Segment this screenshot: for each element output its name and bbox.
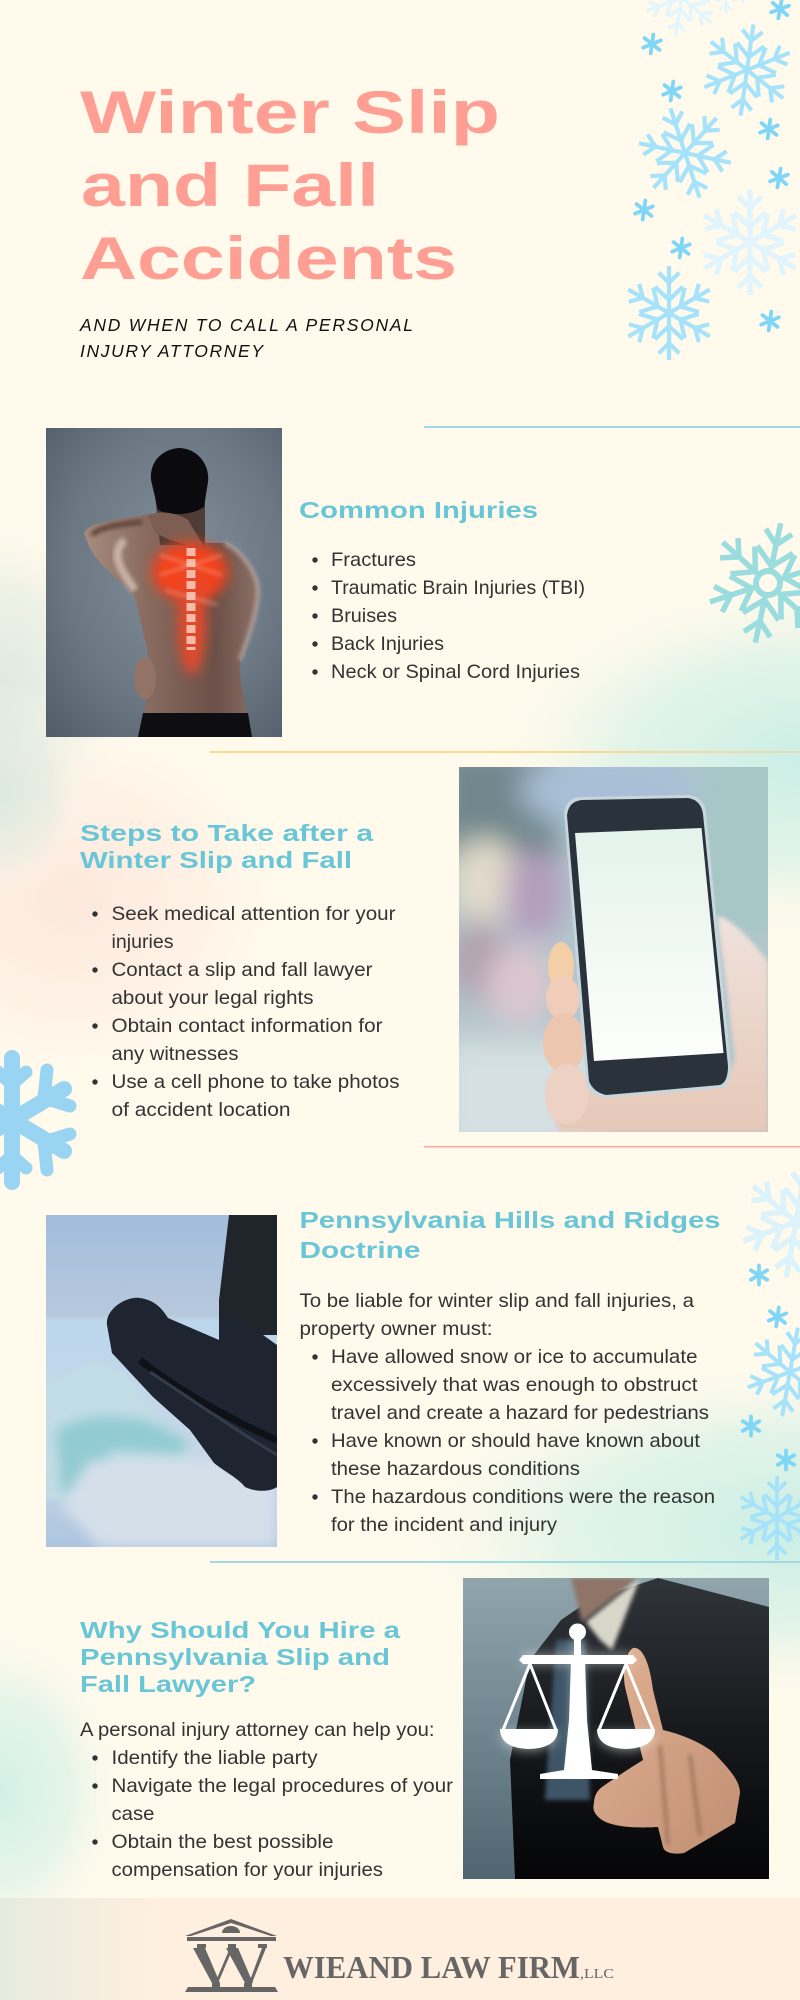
list: Navigate the legal procedures of your: [112, 1775, 454, 1797]
heading: Pennsylvania Hills and Ridges: [300, 1207, 720, 1233]
list: Have known or should have known about: [331, 1430, 701, 1452]
logo: ,LLC: [580, 1967, 614, 1982]
list: Use a cell phone to take photos: [112, 1071, 400, 1093]
list: [92, 903, 400, 1121]
list: [312, 549, 585, 683]
subtitle: [79, 315, 413, 361]
body text: [300, 1290, 694, 1340]
list: compensation for your injuries: [112, 1859, 383, 1881]
list: Obtain the best possible: [112, 1831, 334, 1853]
icon: teal snowflake: [695, 510, 800, 656]
list: [92, 1747, 454, 1881]
heading: Steps to Take after a: [80, 820, 373, 846]
title: Accidents: [80, 225, 457, 292]
heading: Pennsylvania Slip and: [80, 1644, 390, 1670]
snowflakes top right: [621, 0, 800, 360]
photo: back pain: [46, 428, 282, 737]
list: Back Injuries: [331, 633, 444, 655]
divider: pink: [424, 1146, 800, 1148]
photo: lawyer with scales: [463, 1578, 769, 1879]
title: [80, 79, 500, 292]
heading: Winter Slip and Fall: [80, 847, 352, 873]
list: these hazardous conditions: [331, 1458, 580, 1480]
heading: [80, 1617, 400, 1697]
list: Traumatic Brain Injuries (TBI): [331, 577, 585, 599]
list: injuries: [112, 931, 174, 953]
list: any witnesses: [112, 1043, 239, 1065]
list: about your legal rights: [112, 987, 314, 1009]
list: of accident location: [112, 1099, 290, 1121]
list: The hazardous conditions were the reason: [331, 1486, 715, 1508]
list: Seek medical attention for your: [112, 903, 396, 925]
divider: teal top: [424, 426, 800, 428]
heading: Doctrine: [300, 1237, 420, 1263]
body text: To be liable for winter slip and fall injuries, a: [300, 1290, 694, 1312]
body text: A personal injury attorney can help you:: [80, 1719, 434, 1741]
title: Winter Slip: [80, 79, 500, 146]
icon: courthouse W: [185, 1919, 278, 1992]
logo wordmark: WIEAND LAW FIRM: [283, 1950, 580, 1985]
subtitle: INJURY ATTORNEY: [80, 341, 264, 361]
panel: common injuries: [46, 428, 800, 737]
list: Contact a slip and fall lawyer: [112, 959, 373, 981]
heading: Why Should You Hire a: [80, 1617, 400, 1643]
list: excessively that was enough to obstruct: [331, 1374, 698, 1396]
list: [312, 1346, 715, 1536]
footer band: [0, 1898, 800, 2000]
panel: steps: [0, 750, 790, 1182]
list: Obtain contact information for: [112, 1015, 383, 1037]
icon: chunky snowflake: [0, 1058, 70, 1182]
divider: yellow: [210, 751, 800, 753]
photo: phone in hand: [459, 767, 768, 1132]
logo: [185, 1919, 614, 1992]
list: case: [112, 1803, 154, 1825]
panel: hills and ridges doctrine: [46, 1157, 800, 1560]
divider: teal lower: [210, 1561, 800, 1563]
list: Fractures: [331, 549, 416, 571]
list: Identify the liable party: [112, 1747, 318, 1769]
heading: [80, 820, 373, 873]
snowflakes right: [730, 1157, 800, 1560]
title: and Fall: [81, 152, 379, 219]
heading: Common Injuries: [299, 497, 538, 523]
list: travel and create a hazard for pedestrians: [331, 1402, 709, 1424]
heading: [300, 1207, 720, 1263]
list: Neck or Spinal Cord Injuries: [331, 661, 580, 683]
subtitle: AND WHEN TO CALL A PERSONAL: [79, 315, 413, 335]
heading: Fall Lawyer?: [80, 1671, 256, 1697]
list: Have allowed snow or ice to accumulate: [331, 1346, 698, 1368]
list: for the incident and injury: [331, 1514, 557, 1536]
list: Bruises: [331, 605, 397, 627]
photo: boot on ice: [46, 1215, 277, 1547]
body text: property owner must:: [300, 1318, 492, 1340]
panel: why hire a lawyer: [80, 1578, 769, 1881]
